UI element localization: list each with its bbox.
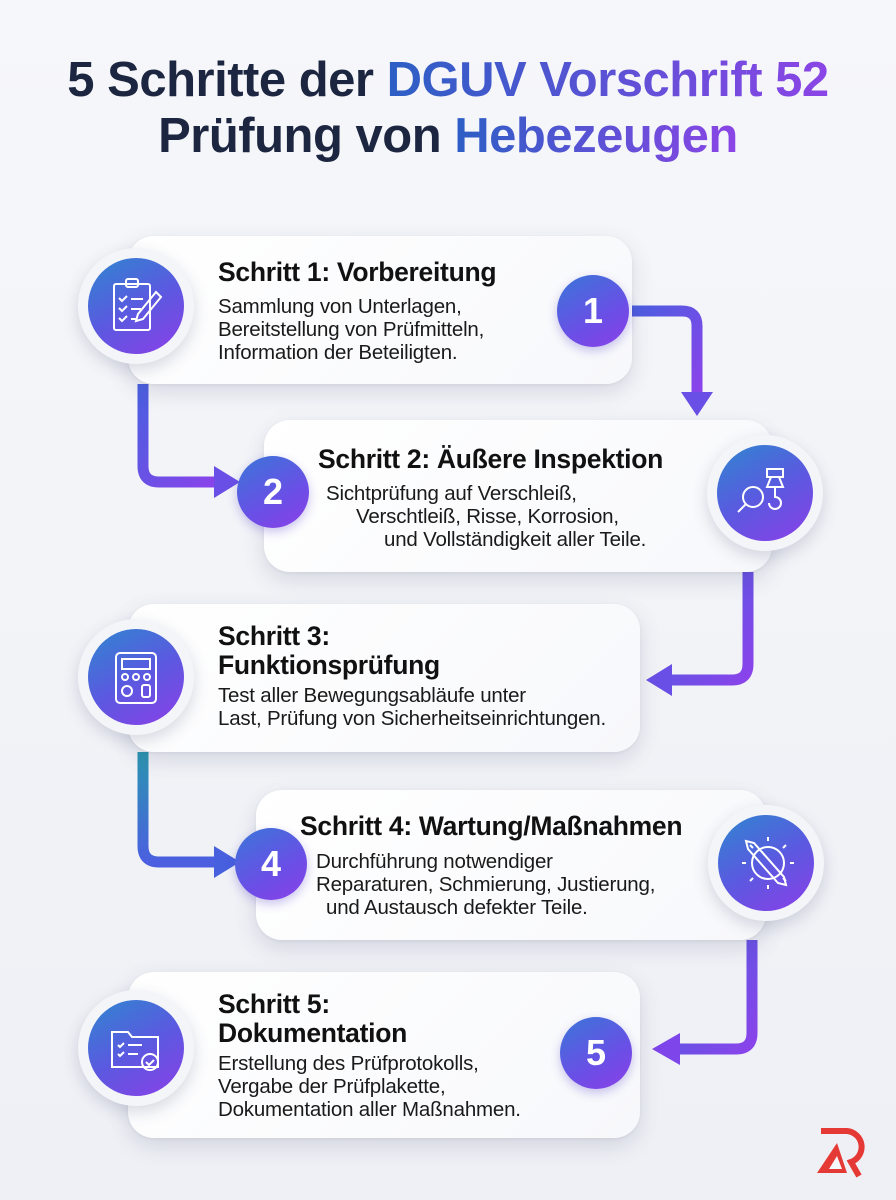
panel: step 1 [128,236,632,384]
number 4: 4 [261,843,281,884]
text 2: Sichtprüfung auf Verschleiß, [326,482,577,505]
number 5: 5 [586,1032,606,1073]
text 4: Reparaturen, Schmierung, Justierung, [316,873,655,896]
text 3 [218,684,606,730]
text 5 [218,1052,521,1121]
number 2: 2 [263,471,283,512]
icon: folder check [78,990,194,1106]
heading 5: Dokumentation [218,1018,407,1048]
icon: control panel [78,619,194,735]
text 5: Erstellung des Prüfprotokolls, [218,1052,479,1075]
heading 1: Schritt 1: Vorbereitung [218,257,496,287]
text 3: Last, Prüfung von Sicherheitseinrichtungen. [218,707,606,730]
text 4 [316,850,655,919]
heading 4: Schritt 4: Wartung/Maßnahmen [300,811,682,841]
text 1: Information der Beteiligten. [218,341,457,364]
panel: step 3 [128,604,640,752]
title: 5 Schritte der DGUV Vorschrift 52 [67,53,829,107]
heading 5 [218,989,407,1048]
heading 3 [218,621,440,680]
text 4: Durchführung notwendiger [316,850,553,873]
panel: step 5 [128,972,640,1138]
text 1: Sammlung von Unterlagen, [218,295,462,318]
text 3: Test aller Bewegungsabläufe unter [218,684,526,707]
heading 5: Schritt 5: [218,989,330,1019]
text 5: Dokumentation aller Maßnahmen. [218,1098,521,1121]
icon: gear wrench [708,805,824,921]
heading 3: Funktionsprüfung [218,650,440,680]
text 4: und Austausch defekter Teile. [326,896,588,919]
icon: clipboard [78,248,194,364]
text 1 [218,295,484,364]
text 5: Vergabe der Prüfplakette, [218,1075,446,1098]
number 2 [237,456,309,528]
heading 3: Schritt 3: [218,621,330,651]
title [67,53,829,163]
heading 2: Schritt 2: Äußere Inspektion [318,444,663,474]
text 2: und Vollständigkeit aller Teile. [384,528,646,551]
number 1: 1 [583,290,603,331]
panel: step 2 [264,420,772,572]
text 2 [326,482,646,551]
logo [817,1128,865,1178]
title: Prüfung von Hebezeugen [158,109,738,163]
text 1: Bereitstellung von Prüfmitteln, [218,318,484,341]
icon: magnifier hook [707,435,823,551]
text 2: Verschtleiß, Risse, Korrosion, [356,505,619,528]
number 4 [235,828,307,900]
number 5 [560,1017,632,1089]
panel: step 4 [256,790,766,940]
number 1 [557,275,629,347]
